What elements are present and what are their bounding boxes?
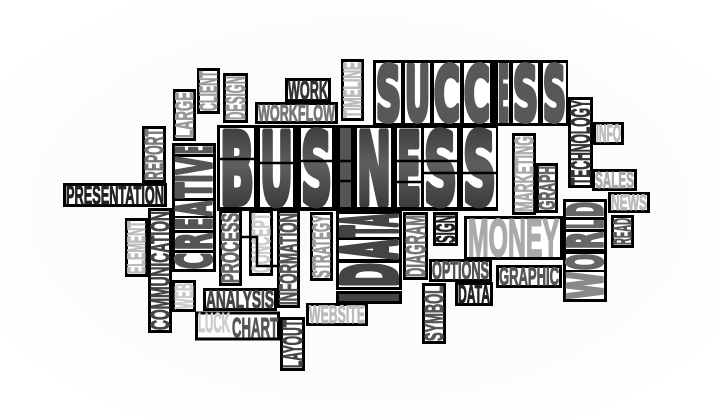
word: LAYOUT (277, 318, 308, 370)
word: COMMUNICATION (145, 210, 175, 332)
word: ANALYSIS: ANALYSIS (206, 286, 274, 314)
word: SUCCESS: C (464, 52, 490, 138)
text: CONCEPT (246, 213, 276, 273)
word: WORKFLOW: WORKFLOW (258, 100, 335, 126)
word: CONCEPT (246, 212, 276, 274)
word: WEBSITE (308, 301, 366, 329)
word: COMMUNICATION: COMMUNICATION (145, 211, 175, 330)
word: SYMBOL (419, 284, 449, 342)
word: INFORMATION (275, 212, 303, 306)
word: WORLD: O (559, 254, 614, 270)
text: ELEMENT (123, 221, 151, 274)
word: GRAPH: GRAPH (534, 166, 560, 210)
word: WORK (286, 75, 330, 105)
word: BUSINESS: U (260, 114, 293, 228)
text: S (543, 52, 566, 138)
word: INFORMATION: INFORMATION (275, 213, 303, 305)
word: WORK: WORK (288, 75, 328, 105)
word: WORLD: R (559, 232, 614, 249)
text: INFO (596, 120, 621, 148)
word: DIAGRAM (400, 214, 431, 278)
text: WEB (169, 283, 199, 309)
text: DESIGN (220, 76, 251, 120)
text: PRESENTATION (66, 180, 164, 210)
text: TIMELINE (339, 62, 367, 118)
word: SUCCESS: E (498, 52, 509, 138)
word: WORLD: W (559, 272, 614, 299)
word: BUSINESS: S (424, 114, 457, 228)
text: E (168, 146, 223, 154)
text: D (559, 202, 614, 217)
word: GRAPHIC: GRAPHIC (499, 263, 559, 291)
word: DESIGN (220, 74, 251, 122)
word: GRAPH (534, 164, 560, 212)
clipped bar below DATA (338, 292, 400, 302)
word: SALES (594, 167, 636, 193)
word: OPTIONS (430, 257, 490, 285)
word: NEWS: NEWS (611, 190, 647, 215)
word: SYMBOL: SYMBOL (419, 286, 449, 341)
text: MARKETING (509, 136, 539, 212)
text: READ (609, 218, 637, 245)
text: CLIENT (195, 71, 223, 111)
text: REPORT (139, 129, 169, 180)
word: DATA small (456, 279, 492, 309)
word: PRESENTATION (64, 180, 166, 210)
word: BUSINESS (218, 114, 498, 228)
word: SIGN (430, 214, 461, 244)
word: CREATIVE (168, 144, 223, 270)
word: CREATIVE: E (168, 218, 223, 230)
word: SUCCESS: S (513, 52, 538, 138)
word: WORKFLOW (256, 100, 336, 126)
text: S (463, 114, 496, 228)
text: DATA (458, 279, 490, 309)
word: SUCCESS: S (376, 52, 401, 138)
word: CLIENT (195, 70, 223, 112)
word: PROCESS: PROCESS (217, 213, 245, 283)
word: TECHNOLOGY (565, 98, 596, 186)
text: SIGN (430, 215, 461, 243)
word: CREATIVE: A (168, 201, 223, 216)
word: LARGE (171, 90, 199, 140)
word: OPTIONS: OPTIONS (432, 257, 489, 285)
word: GRAPHIC (498, 263, 560, 291)
text: CHART (232, 312, 278, 343)
word: REPORT (139, 128, 169, 182)
word: MARKETING (509, 134, 539, 214)
word: WORLD: L (559, 220, 614, 229)
word: TIMELINE (339, 60, 367, 120)
word: ELEMENT (123, 220, 151, 276)
text: STRATEGY (308, 215, 336, 278)
text: LAYOUT (277, 320, 308, 368)
word: SUCCESS: C (434, 52, 460, 138)
word: DATA large: D (328, 263, 414, 287)
word: MONEY (466, 209, 562, 268)
word: ANALYSIS (204, 286, 276, 314)
word: CREATIVE: R (168, 233, 223, 250)
word: BUSINESS: S (301, 114, 332, 228)
word: WEBSITE: WEBSITE (309, 301, 365, 329)
word: SALES: SALES (595, 167, 634, 193)
word: NEWS (610, 190, 648, 215)
word: WEB (169, 282, 199, 310)
word: READ (609, 216, 637, 246)
text: MONEY (468, 209, 559, 268)
word: PROCESS (217, 212, 245, 284)
word: DATA large: A (328, 240, 414, 259)
connector outline (242, 237, 298, 266)
text: DIAGRAM (400, 215, 431, 277)
text: TA (328, 214, 414, 237)
word: LARGE: LARGE (171, 92, 199, 138)
word: SUCCESS: U (405, 52, 430, 138)
word: CREATIVE: C (168, 253, 223, 269)
word: LUCK and CHART: LUCK (198, 307, 230, 338)
word: BUSINESS: B (220, 114, 254, 228)
word: STRATEGY (308, 214, 336, 280)
word: BUSINESS: N (357, 114, 391, 228)
word: INFO (594, 120, 622, 148)
word: SUCCESS (374, 52, 566, 138)
word: WORLD (559, 200, 614, 300)
word: BUSINESS: E (397, 114, 421, 228)
word: CREATIVE: TIV (168, 157, 223, 198)
